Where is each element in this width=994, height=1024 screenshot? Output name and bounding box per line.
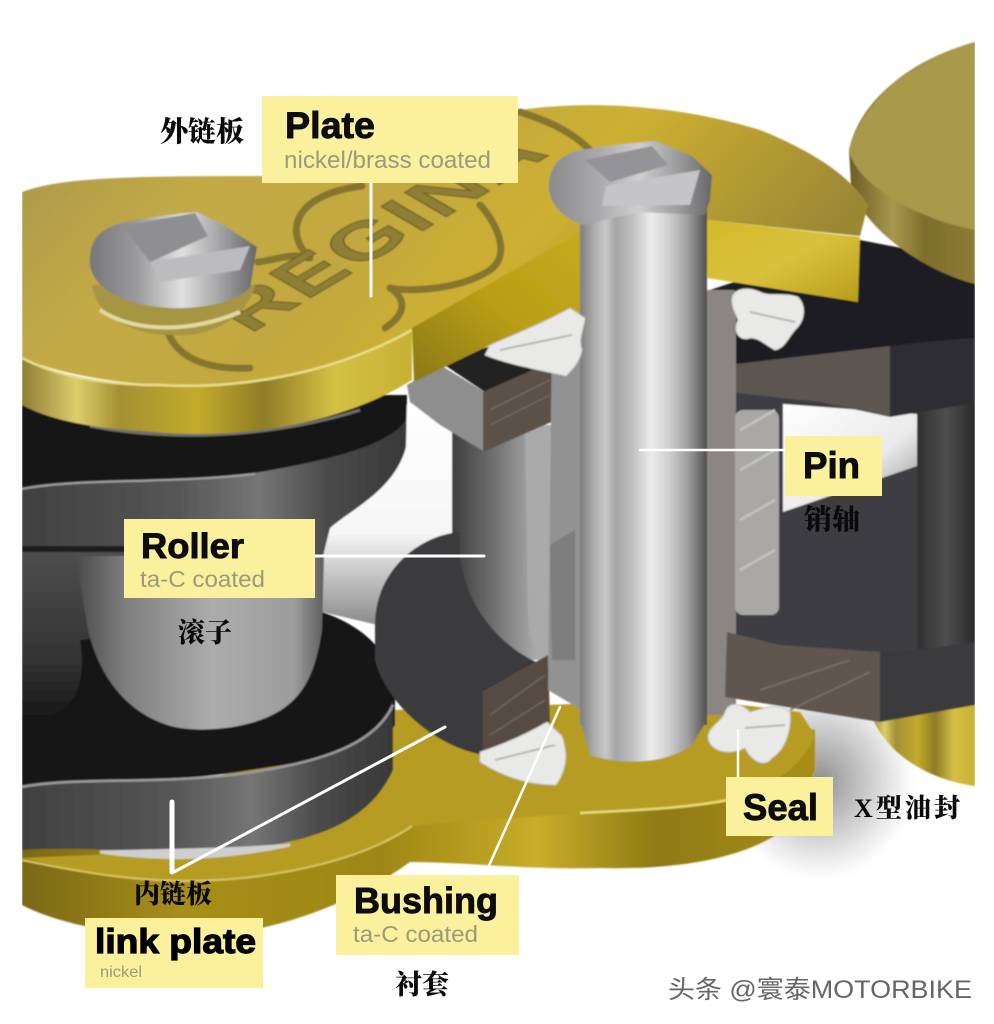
inner plate cut sections right	[725, 338, 975, 722]
chinese captions	[134, 116, 960, 1000]
shadow under plate	[760, 706, 906, 870]
label: Bushing	[336, 875, 519, 955]
caption: pin: 销轴	[804, 503, 860, 536]
label: link plate: link plate	[95, 923, 256, 961]
label: Seal	[726, 777, 833, 836]
pin	[549, 141, 712, 762]
label: link plate	[85, 918, 263, 988]
leader lines	[172, 183, 785, 872]
watermark: 头条 @寰泰MOTORBIKE	[668, 976, 972, 1004]
plate logo: REGINA	[195, 122, 563, 342]
label: Roller: ta-C coated	[140, 566, 265, 592]
label: Plate: nickel/brass coated	[284, 147, 491, 174]
label: Bushing: ta-C coated	[353, 921, 478, 947]
label: Plate	[262, 96, 518, 183]
caption: seal: X型油封	[854, 794, 960, 823]
label: Seal: Seal	[743, 787, 818, 828]
right bushing wall and inner section	[702, 290, 779, 715]
bushing left wall	[547, 358, 581, 710]
label: Roller: Roller	[141, 527, 244, 566]
label: Roller	[124, 519, 315, 598]
left roller and inner link plate	[22, 395, 407, 858]
caption: outer plate: 外链板	[160, 116, 244, 148]
left rivet head	[90, 212, 257, 335]
centre roller and inner plate section	[375, 340, 565, 755]
right neighbouring link	[710, 42, 975, 786]
seals	[480, 289, 804, 785]
lower outer plate	[22, 700, 815, 938]
label: Bushing: Bushing	[354, 880, 498, 921]
top outer plate	[22, 105, 868, 434]
label: link plate: nickel	[100, 964, 142, 981]
gap behind centre roller	[322, 404, 454, 625]
caption: roller: 滚子	[178, 617, 232, 648]
caption: inner plate: 内链板	[134, 879, 212, 909]
label: Pin: Pin	[803, 445, 860, 486]
label: Pin	[785, 436, 882, 496]
label: Plate: Plate	[285, 105, 375, 146]
caption: bushing: 衬套	[395, 970, 449, 1000]
